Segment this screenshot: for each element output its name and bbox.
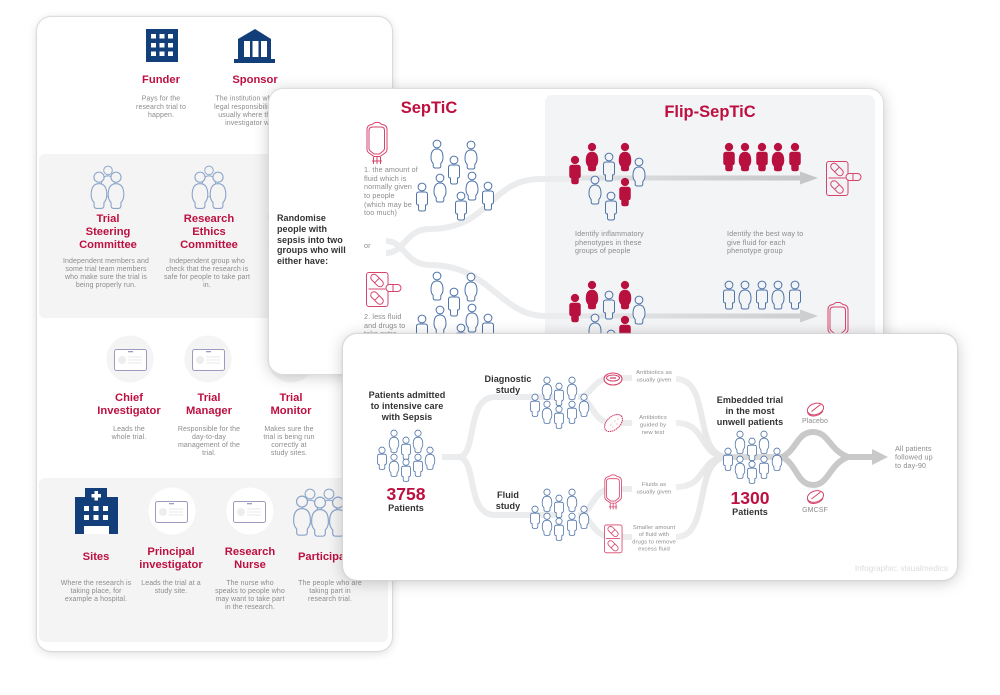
role: research ethics committee: Research bbox=[184, 213, 234, 225]
icon: pills bbox=[604, 525, 622, 553]
text: randomise: groups who will bbox=[277, 245, 346, 255]
role: funder: Funder bbox=[142, 74, 181, 86]
icon: GMCSF tablet bbox=[806, 489, 825, 504]
role: research ethics committee bbox=[164, 166, 250, 289]
label: antibiotics guided: new test bbox=[642, 430, 665, 436]
role: funder: Pays for the bbox=[142, 96, 180, 103]
role: sponsor: The institution which has bbox=[215, 96, 295, 103]
role: research ethics committee: check that the research is bbox=[166, 266, 249, 273]
role: trial monitor bbox=[263, 336, 315, 457]
people: embedded trial group bbox=[724, 431, 782, 483]
label: placebo: Placebo bbox=[802, 418, 828, 425]
text: patients admitted: Patients admitted bbox=[369, 390, 445, 400]
label: GMCSF: GMCSF bbox=[802, 507, 828, 514]
heading: SepTiC: SepTiC bbox=[401, 99, 457, 117]
text: identify fluid way: give fluid for each bbox=[727, 238, 786, 247]
text: embedded trial: Embedded trial bbox=[717, 395, 783, 405]
role: trial manager: trial. bbox=[202, 450, 216, 457]
panel: trial pathway bbox=[343, 334, 957, 580]
stat: 1300 patients: 1300 bbox=[731, 488, 770, 508]
role: trial steering committee: who make sure the trial is bbox=[64, 274, 147, 281]
arrow: top phenotype flow bbox=[570, 172, 818, 184]
text: option 1: too much) bbox=[364, 208, 397, 217]
label: fluids as usually given: Fluids as bbox=[642, 482, 666, 488]
role: funder: research trial to bbox=[136, 104, 186, 111]
stat: 3758 patients: Patients bbox=[388, 503, 424, 513]
stat: 3758 patients: 3758 bbox=[387, 484, 426, 504]
label: smaller amount of fluid: Smaller amount bbox=[633, 525, 675, 531]
people: diagnostic group bbox=[531, 377, 589, 428]
role: funder: happen. bbox=[148, 112, 174, 119]
role: participants bbox=[294, 489, 362, 603]
icon: petri dish bbox=[604, 373, 622, 385]
label: fluids as usually given bbox=[632, 480, 676, 496]
role: principal investigator: investigator bbox=[139, 559, 203, 571]
band: sites background bbox=[39, 478, 388, 642]
label: antibiotics guided: Antibiotics bbox=[639, 415, 667, 421]
role: chief investigator: Investigator bbox=[97, 405, 161, 417]
people: group 1 bbox=[416, 140, 494, 220]
text: diagnostic study: study bbox=[496, 385, 521, 395]
text: option 2: take extra bbox=[364, 329, 397, 338]
text: option 1: to people bbox=[364, 191, 395, 200]
panel: trial team roles bbox=[37, 17, 392, 651]
role: chief investigator: whole trial. bbox=[111, 434, 146, 441]
role: funder bbox=[136, 29, 186, 119]
label: smaller amount of fluid bbox=[632, 523, 677, 552]
role: trial manager: management of the bbox=[178, 442, 240, 449]
text: option 1: normally given bbox=[364, 182, 412, 191]
people: blue phenotype row bbox=[724, 281, 800, 309]
text: patients admitted: to intensive care bbox=[371, 401, 443, 411]
role: sponsor: legal responsibility for the bbox=[214, 104, 296, 111]
role: trial steering committee: some trial team members bbox=[65, 266, 147, 273]
arrow: split into studies bbox=[442, 397, 560, 515]
arrow: embedded trial trunk bbox=[725, 454, 782, 460]
label: smaller amount of fluid: drugs to remove bbox=[632, 540, 677, 546]
text: fluid study: study bbox=[496, 501, 521, 511]
role: trial monitor: study sites. bbox=[271, 450, 307, 457]
role: research ethics committee: in. bbox=[203, 282, 211, 289]
hidden heading fragments bbox=[268, 213, 270, 247]
role: chief investigator: Chief bbox=[115, 392, 143, 404]
text: option 1: (which may be bbox=[364, 200, 412, 209]
role: principal investigator: Principal bbox=[147, 546, 195, 558]
role: research ethics committee: Committee bbox=[180, 239, 238, 251]
label: antibiotics as usually given: usually given bbox=[636, 378, 672, 384]
role: trial manager: Trial bbox=[197, 392, 221, 404]
text: identify fluid way: phenotype group bbox=[727, 246, 783, 255]
role: research nurse: Nurse bbox=[234, 559, 266, 571]
background: Flip-SepTiC panel bbox=[545, 95, 875, 385]
role: research nurse: speaks to people who bbox=[215, 588, 285, 595]
role: sites: Where the research is bbox=[61, 580, 132, 587]
role: trial steering committee: being properly run. bbox=[76, 282, 136, 289]
text: or: or bbox=[364, 241, 371, 250]
people: phenotypes group 1 bbox=[570, 143, 645, 220]
role: research ethics committee: Independent group who bbox=[169, 258, 245, 265]
role: trial steering committee: Steering bbox=[86, 226, 131, 238]
role: trial steering committee: Independent members and bbox=[63, 258, 149, 265]
role: research nurse: may want to take part bbox=[215, 596, 285, 603]
text: identify phenotypes: phenotypes in these bbox=[575, 238, 642, 247]
role: trial steering committee: Trial bbox=[96, 213, 120, 225]
label: antibiotics as usually given bbox=[632, 368, 676, 384]
icon: fluid bag bbox=[367, 122, 387, 164]
role: chief investigator bbox=[97, 336, 161, 441]
role: trial monitor: Trial bbox=[279, 392, 303, 404]
role: research ethics committee: Ethics bbox=[192, 226, 226, 238]
text: randomise: people with bbox=[277, 224, 327, 234]
icon: placebo tablet bbox=[806, 401, 825, 417]
icon: fluid bag outcome bbox=[828, 302, 848, 344]
arrow: randomisation flow top bbox=[386, 179, 575, 253]
stat: 3758 patients bbox=[387, 484, 426, 513]
role: principal investigator bbox=[139, 488, 203, 595]
heading: Flip-SepTiC: Flip-SepTiC bbox=[664, 103, 756, 121]
label: antibiotics guided: guided by bbox=[640, 422, 666, 428]
role: sponsor: investigator works. bbox=[225, 120, 285, 127]
arrow: bottom phenotype flow bbox=[570, 310, 818, 322]
band: committees background bbox=[39, 154, 388, 318]
role: sites: Sites bbox=[83, 551, 109, 563]
icon: pills with capsule bbox=[366, 272, 401, 306]
role: trial steering committee bbox=[63, 166, 149, 289]
role: trial manager: Responsible for the bbox=[178, 426, 240, 433]
arrow: converging flows bbox=[676, 379, 728, 537]
label: antibiotics as usually given: Antibiotics as bbox=[636, 370, 672, 376]
text: follow up: followed up bbox=[895, 452, 933, 462]
role: sites bbox=[61, 488, 132, 603]
role: sites: taking place, for bbox=[70, 588, 122, 595]
people: phenotypes group 2 bbox=[570, 281, 645, 358]
text: option 2: 2. less fluid bbox=[364, 312, 402, 321]
text: fluid study: Fluid bbox=[497, 490, 519, 500]
text: follow up: to day-90 bbox=[895, 461, 926, 470]
role: research nurse bbox=[215, 488, 285, 611]
role: research nurse: in the research. bbox=[225, 604, 275, 611]
role: sponsor: Sponsor bbox=[232, 74, 278, 86]
role: sponsor bbox=[214, 29, 296, 127]
text: identify phenotypes: groups of people bbox=[575, 246, 630, 255]
arrow: study branches bbox=[578, 378, 632, 537]
stat: 1300 patients: Patients bbox=[732, 507, 768, 517]
text: embedded trial: in the most bbox=[725, 406, 775, 416]
icon: bacteria bbox=[601, 411, 626, 435]
role: trial monitor: Makes sure the bbox=[264, 426, 314, 433]
panel: SepTiC and Flip-SepTiC bbox=[269, 89, 883, 374]
role: trial manager bbox=[178, 336, 240, 457]
role: participants: taking part in bbox=[309, 588, 351, 595]
role: participants: research trial. bbox=[308, 596, 352, 603]
text: randomise: sepsis into two bbox=[277, 235, 343, 245]
icon: fluid bag bbox=[605, 475, 621, 509]
people: all patients bbox=[378, 430, 435, 481]
label: smaller amount of fluid: excess fluid bbox=[638, 546, 670, 552]
credit: Infographic: visualmedics bbox=[855, 563, 948, 573]
people: red phenotype row bbox=[724, 143, 800, 171]
role: chief investigator: Leads the bbox=[113, 426, 145, 433]
role: trial manager: day-to-day bbox=[192, 434, 226, 441]
text: randomise: Randomise bbox=[277, 213, 326, 223]
icon: pills outcome bbox=[826, 162, 861, 196]
role: sponsor: usually where the chief bbox=[218, 112, 292, 119]
arrow: randomised treatment flow bbox=[782, 432, 888, 485]
label: smaller amount of fluid: of fluid with bbox=[639, 532, 669, 538]
label: fluids as usually given: usually given bbox=[636, 490, 672, 496]
people: fluid group bbox=[531, 489, 589, 540]
role: sites: example a hospital. bbox=[65, 596, 127, 603]
text: follow up: All patients bbox=[895, 444, 932, 453]
text: option 2: and drugs to bbox=[364, 321, 405, 330]
role: trial steering committee: Committee bbox=[79, 239, 137, 251]
role: research nurse: Research bbox=[225, 546, 275, 558]
role: participants: Participants bbox=[298, 551, 362, 563]
text: identify phenotypes: Identify inflammatory bbox=[575, 229, 644, 238]
role: trial monitor: correctly at bbox=[271, 442, 307, 449]
role: participants: The people who are bbox=[298, 580, 362, 587]
role: principal investigator: study site. bbox=[155, 588, 187, 595]
role: research nurse: The nurse who bbox=[226, 580, 274, 587]
text: patients admitted: with Sepsis bbox=[381, 412, 432, 422]
role: trial manager: Manager bbox=[186, 405, 233, 417]
label: antibiotics guided bbox=[632, 414, 676, 436]
arrow: randomisation flow bottom bbox=[386, 241, 575, 316]
role: principal investigator: Leads the trial at a bbox=[141, 580, 201, 587]
people: group 2 bbox=[416, 272, 494, 352]
text: option 1: 1. the amount of bbox=[364, 165, 418, 174]
role: trial monitor: trial is being run bbox=[263, 434, 315, 441]
stat: 1300 patients bbox=[731, 488, 770, 517]
text: embedded trial: unwell patients bbox=[717, 417, 783, 427]
role: trial monitor: Monitor bbox=[270, 405, 312, 417]
text: option 1: fluid which is bbox=[364, 174, 407, 183]
text: randomise: either have: bbox=[277, 256, 328, 266]
text: diagnostic study: Diagnostic bbox=[484, 374, 532, 384]
text: identify fluid way: Identify the best way to bbox=[727, 229, 803, 238]
role: research ethics committee: safe for people to take part bbox=[164, 274, 250, 281]
